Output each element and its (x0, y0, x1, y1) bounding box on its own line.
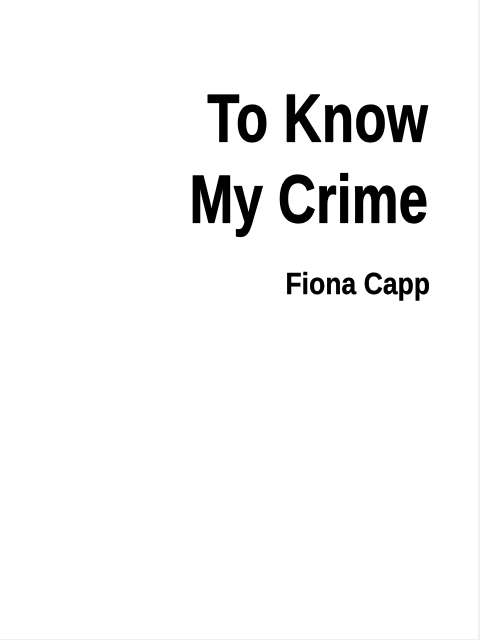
title (190, 80, 428, 237)
right edge line (478, 0, 480, 640)
bottom edge line (0, 639, 480, 640)
title line 1: To Know (207, 80, 428, 156)
author: Fiona Capp (285, 267, 430, 302)
title line 2: My Crime (190, 161, 428, 237)
